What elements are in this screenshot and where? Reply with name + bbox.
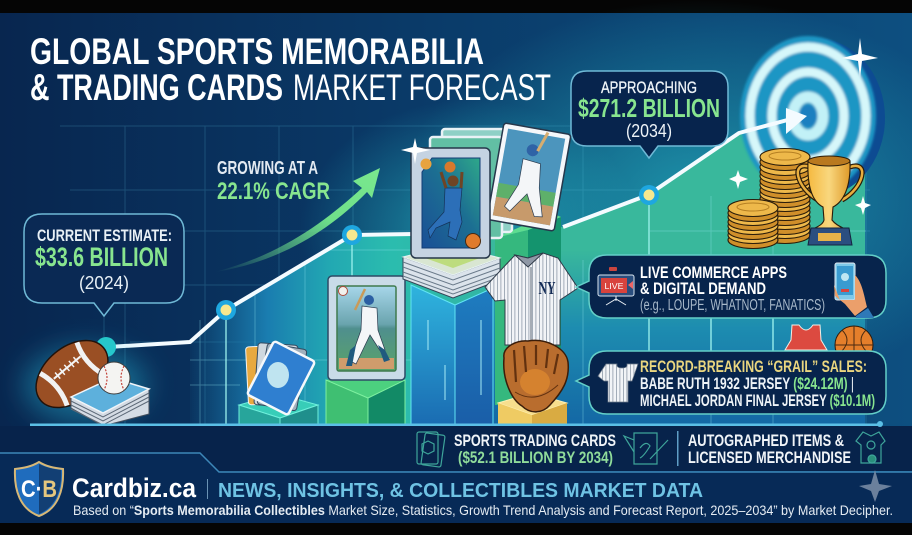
sparkle	[401, 138, 430, 164]
cagr label: 22.1% CAGR	[217, 178, 330, 205]
callout: current estimate: (2024)	[79, 273, 129, 293]
sparkles	[729, 170, 748, 189]
icon: white jersey	[598, 364, 638, 402]
title: GLOBAL SPORTS MEMORABILIA	[30, 30, 484, 72]
callout: current estimate	[24, 214, 184, 316]
back cards	[442, 129, 512, 232]
icon: phone in hand	[834, 263, 874, 318]
growth area under the line	[190, 120, 866, 424]
title: MARKET FORECAST	[293, 66, 551, 108]
callout: approaching: APPROACHING	[601, 78, 697, 97]
bar: teal	[239, 394, 318, 424]
target	[740, 36, 885, 198]
footer: Cardbiz.ca	[72, 473, 197, 503]
panel: live commerce: LIVE COMMERCE APPS	[640, 263, 787, 282]
strip: category band: ($52.1 BILLION BY 2034)	[458, 448, 613, 467]
item: batter card	[328, 276, 405, 380]
baseball card	[487, 123, 571, 231]
icon: shield logo: C·B	[21, 476, 57, 503]
icon: t-shirt	[856, 432, 885, 463]
title	[30, 30, 551, 108]
milestone dots	[216, 185, 659, 320]
strip: category band: LICENSED MERCHANDISE	[688, 448, 851, 467]
item: basketball	[835, 326, 873, 364]
footer: NEWS, INSIGHTS, & COLLECTIBLES MARKET DATA	[218, 480, 703, 502]
cagr label	[217, 157, 330, 205]
coins and trophy	[728, 148, 871, 248]
title: & TRADING CARDS	[30, 66, 283, 108]
panel: grail sales: MICHAEL JORDAN FINAL JERSEY ($10.1M)	[640, 391, 875, 410]
bars	[239, 213, 567, 424]
bar: blue	[411, 285, 493, 424]
stack base	[403, 245, 500, 298]
item: fanned cards	[246, 341, 315, 415]
strip: category band: SPORTS TRADING CARDS	[454, 431, 616, 450]
item: baseball glove	[504, 340, 568, 412]
coin stacks	[728, 148, 810, 248]
bar: gold	[498, 393, 567, 424]
icon: live camera: LIVE	[604, 281, 624, 291]
item: football, baseball and cards	[23, 327, 149, 426]
cagr label: GROWING AT A	[217, 157, 318, 178]
trophy	[798, 156, 862, 245]
footer	[0, 453, 912, 523]
icon: shield logo	[15, 462, 63, 516]
panel: live commerce	[576, 255, 886, 318]
panel: grail sales	[576, 351, 886, 414]
panel: live commerce: & DIGITAL DEMAND	[640, 279, 766, 298]
strip: category band: AUTOGRAPHED ITEMS &	[688, 431, 844, 450]
icon: live camera	[598, 267, 634, 305]
item: red jersey	[785, 325, 827, 350]
icon: cards	[417, 432, 445, 467]
item: yankees jersey: NY	[538, 278, 556, 298]
growth line	[108, 108, 807, 347]
item: yankees jersey	[485, 253, 578, 345]
chart grid	[60, 126, 870, 424]
football	[23, 327, 121, 421]
cagr arrow	[215, 168, 380, 272]
callout: current estimate: $33.6 BILLION	[35, 242, 168, 272]
baseball	[98, 362, 130, 394]
item: card stack with basketball card	[401, 123, 571, 298]
basketball card	[411, 148, 490, 258]
callout: approaching	[571, 71, 728, 158]
panel: grail sales: BABE RUTH 1932 JERSEY ($24.12M) |	[640, 374, 854, 393]
icon: signed item	[624, 433, 668, 464]
callout: current estimate: CURRENT ESTIMATE:	[37, 226, 172, 245]
panel: live commerce: (e.g., LOUPE, WHATNOT, FANATICS)	[640, 297, 825, 314]
strip: category band	[0, 426, 912, 471]
callout: approaching: $271.2 BILLION	[578, 95, 720, 123]
card stack	[71, 378, 149, 426]
baseline axis	[30, 421, 883, 427]
bar: tall green behind jersey	[495, 213, 561, 405]
icon: star watermark	[859, 470, 892, 502]
callout: approaching: (2034)	[626, 121, 672, 141]
bar: green	[326, 372, 405, 424]
